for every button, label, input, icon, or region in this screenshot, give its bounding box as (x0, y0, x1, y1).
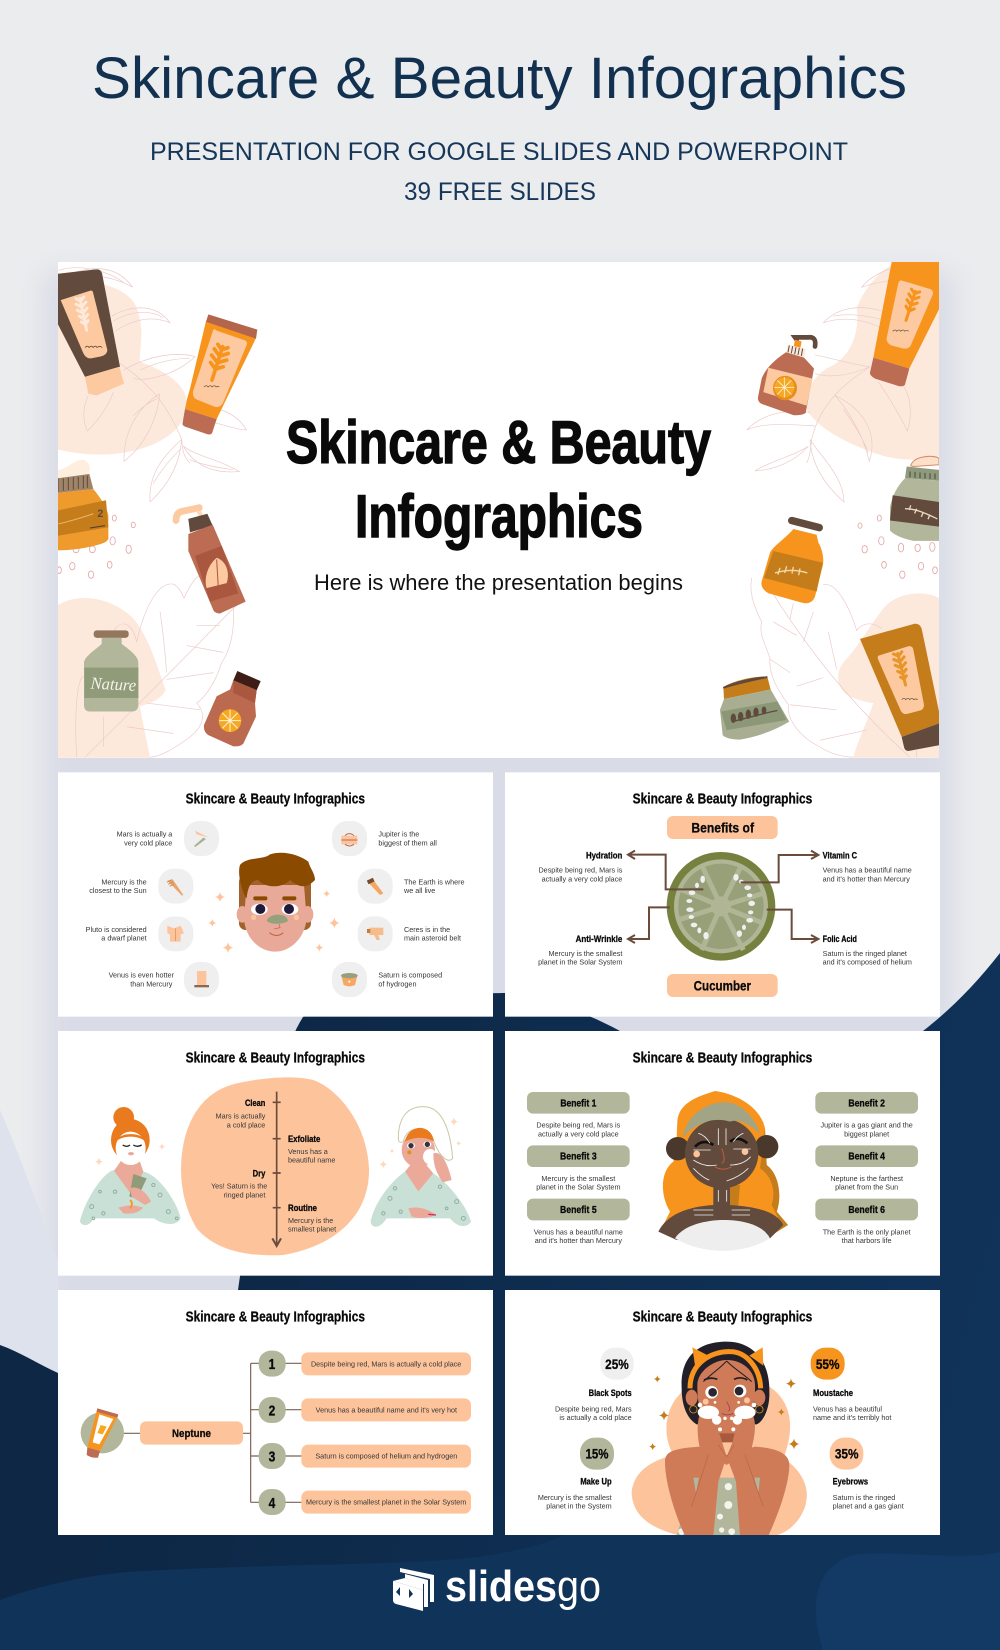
icon: small brown bottle (204, 671, 261, 746)
icon: soap bottle (758, 337, 815, 415)
benefit pills left: Venus has a beautiful name (534, 1227, 623, 1236)
slide texts left: Mercury is the (101, 877, 147, 886)
slide texts left: Mars is actually a (117, 830, 173, 839)
wordmark: slidesgo (445, 1562, 601, 1611)
step: dry: ringed planet (224, 1190, 265, 1199)
item 1: 1 (269, 1357, 275, 1373)
slide texts right: of hydrogen (378, 979, 416, 988)
beauty tool icons (167, 831, 383, 987)
panel: six benefits slide (505, 1031, 940, 1276)
icon: stacked slides (393, 1568, 434, 1611)
slide texts left: very cold place (124, 838, 172, 847)
item 3: 3 (269, 1450, 275, 1466)
benefit pills right: Benefit 6 (848, 1205, 885, 1216)
slide texts right: Saturn is composed (378, 971, 442, 980)
item 1: Despite being red, Mars is actually a cold place (311, 1359, 461, 1368)
benefit: hydration: actually a very cold place (542, 874, 622, 883)
stat: 25% black spots: Black Spots (589, 1388, 632, 1398)
logo: slidesgo (393, 1562, 601, 1611)
panel: routine timeline slide (58, 1031, 493, 1276)
slide texts right: Jupiter is the (378, 830, 419, 839)
connector arrows (628, 851, 818, 943)
benefit pills right: biggest planet (844, 1129, 889, 1138)
benefit: vitamin c: Venus has a beautiful name (823, 866, 912, 875)
benefit pills right: planet from the Sun (835, 1183, 898, 1192)
pill: cucumber: Cucumber (694, 978, 751, 994)
slide texts right: Ceres is in the (404, 925, 450, 934)
icon: right sage jar (890, 456, 939, 541)
subtitle: PRESENTATION FOR GOOGLE SLIDES AND POWERPOINT (150, 138, 848, 166)
step: routine: Routine (288, 1203, 317, 1213)
item 2: Venus has a beautiful name and it's very hot (316, 1405, 457, 1414)
stat: 55% moustache: 55% (816, 1356, 840, 1372)
benefit pills left: Benefit 3 (560, 1152, 597, 1163)
icon: tube on sage circle (81, 1408, 124, 1458)
step: routine: smallest planet (288, 1225, 336, 1234)
icon: orange bottle (761, 521, 823, 603)
benefit pills left: planet in the Solar System (536, 1183, 620, 1192)
slide title: Skincare & Beauty Infographics (633, 1049, 812, 1066)
benefit: anti-wrinkle: Mercury is the smallest (549, 949, 622, 958)
icon: brown tube (58, 269, 124, 395)
slide title: Skincare & Beauty Infographics (186, 1308, 365, 1325)
subtitle: 39 FREE SLIDES (404, 178, 596, 206)
icon: terracotta bottle with pump (176, 508, 246, 613)
icon: orange tube (182, 314, 257, 435)
step: clean: Clean (245, 1098, 265, 1108)
benefit pills left: Mercury is the smallest (541, 1174, 615, 1183)
benefit: anti-wrinkle (538, 934, 622, 967)
icon: sage jar Nature: Nature (89, 673, 137, 695)
benefit: vitamin c: Vitamin C (823, 851, 857, 861)
stat: 25% black spots: 25% (605, 1356, 629, 1372)
benefit pills left: and it's hotter than Mercury (535, 1236, 622, 1245)
step: clean: a cold place (227, 1120, 265, 1129)
stat: 15% make up: Make Up (580, 1477, 612, 1487)
benefit: anti-wrinkle: planet in the Solar System (538, 958, 622, 967)
item 1 (259, 1351, 471, 1377)
benefit: folic acid: Folic Acid (823, 934, 857, 944)
illustration: woman with massage lines (658, 1091, 788, 1251)
cover left decorations (57, 268, 261, 758)
step: clean: Mars is actually (216, 1112, 266, 1121)
icon: orange jar (58, 460, 108, 550)
slide title: Skincare & Beauty Infographics (186, 1049, 365, 1066)
cover heading (286, 409, 712, 550)
slide texts left: Venus is even hotter (109, 971, 175, 980)
item 4: 4 (269, 1496, 276, 1512)
item 3: Saturn is composed of helium and hydrogen (315, 1452, 457, 1461)
icon: orange jar: 2 (97, 508, 103, 520)
item 4 (259, 1489, 471, 1515)
benefit pills left: Benefit 5 (560, 1205, 597, 1216)
slide title: Skincare & Beauty Infographics (633, 1308, 812, 1325)
stat: 25% black spots (555, 1348, 634, 1422)
stat: 35% eyebrows: Eyebrows (833, 1477, 868, 1487)
step: dry: Yes! Saturn is the (211, 1182, 267, 1191)
benefit: folic acid: Saturn is the ringed planet (823, 949, 907, 958)
panel: neptune tree slide (58, 1290, 493, 1535)
benefit: vitamin c (823, 851, 912, 883)
slide texts left: Pluto is considered (86, 925, 147, 934)
benefit pills right: Jupiter is a gas giant and the (821, 1121, 913, 1130)
step: dry: Dry (253, 1169, 265, 1179)
page title: Skincare & Beauty Infographics (92, 46, 907, 111)
step: clean (216, 1098, 266, 1129)
benefit pills right: Benefit 4 (848, 1152, 885, 1163)
node: neptune: Neptune (172, 1428, 211, 1440)
cover right decorations (720, 262, 939, 758)
benefit: hydration (538, 851, 623, 883)
benefit pills right (815, 1092, 918, 1245)
stat: 15% make up: planet in the System (546, 1502, 612, 1511)
stat: 55% moustache: Moustache (813, 1388, 853, 1398)
benefit: hydration: Hydration (586, 851, 623, 861)
stat: 15% make up: 15% (585, 1446, 609, 1462)
icon: sage jar Nature (84, 630, 138, 712)
cover heading: Skincare & Beauty (286, 409, 712, 476)
step: exfoliate: Venus has a (288, 1147, 329, 1156)
panel: cucumber benefits slide (505, 772, 940, 1017)
slide texts right: biggest of them all (378, 838, 437, 847)
benefit: hydration: Despite being red, Mars is (538, 866, 623, 875)
stat: 35% eyebrows (830, 1438, 904, 1511)
step: routine: Mercury is the (288, 1216, 333, 1225)
slide title: Skincare & Beauty Infographics (633, 790, 812, 807)
slide texts left: than Mercury (130, 979, 173, 988)
subtitle (150, 138, 848, 206)
peach blob (181, 1077, 369, 1255)
stat: 55% moustache: Venus has a beautiful (813, 1404, 882, 1413)
benefit pills left: actually a very cold place (538, 1129, 619, 1138)
node: neptune (140, 1421, 243, 1445)
benefit: vitamin c: and it's hotter than Mercury (823, 874, 910, 883)
slide texts left: closest to the Sun (89, 886, 147, 895)
benefit pills left: Despite being red, Mars is (536, 1121, 621, 1130)
item 2: 2 (269, 1403, 275, 1419)
item 2 (259, 1397, 471, 1423)
stat: 55% moustache (811, 1348, 891, 1422)
pill: benefits of: Benefits of (691, 820, 754, 836)
stat: 25% black spots: Despite being red, Mars (555, 1404, 632, 1413)
panel: main cover slide (57, 262, 939, 758)
benefit pills right: The Earth is the only planet (823, 1227, 911, 1236)
slide texts right: main asteroid belt (404, 934, 461, 943)
step: exfoliate: Exfoliate (288, 1134, 320, 1144)
illustration: man's face (237, 853, 315, 952)
slide title: Skincare & Beauty Infographics (186, 790, 365, 807)
step: routine (288, 1203, 336, 1234)
stat: 15% make up: Mercury is the smallest (538, 1493, 612, 1502)
benefit: folic acid (823, 934, 912, 967)
illustration: woman washing face (632, 1342, 807, 1536)
step: exfoliate (288, 1134, 335, 1165)
illustration: woman with towel (371, 1107, 471, 1227)
illustration: woman with face mask (80, 1107, 181, 1225)
slide texts right: The Earth is where (404, 877, 465, 886)
slide texts right: we all live (403, 886, 435, 895)
sparkles (95, 1117, 461, 1168)
stat: 35% eyebrows: planet and a gas giant (833, 1502, 904, 1511)
timeline arrow (272, 1092, 281, 1246)
icon circles (158, 821, 393, 997)
slide texts left (86, 830, 175, 988)
icon: right orange tube (870, 262, 939, 386)
stat: 15% make up (538, 1438, 614, 1511)
slide texts right (378, 830, 465, 988)
cover heading: Infographics (355, 483, 643, 550)
benefit pills left: Benefit 1 (560, 1098, 597, 1109)
icon: mustard tube (860, 624, 939, 751)
sparkles (208, 890, 340, 953)
icon: sage low jar (720, 677, 789, 740)
step: dry (211, 1169, 267, 1199)
item 3 (259, 1443, 471, 1469)
illustration: cucumber slice (667, 852, 775, 961)
panel: face icons slide (58, 772, 493, 1017)
stat: 55% moustache: name and it's terribly hot (813, 1413, 891, 1422)
item 4: Mercury is the smallest planet in the Solar System (306, 1498, 466, 1507)
step: exfoliate: beautiful name (288, 1156, 335, 1165)
slide texts left: a dwarf planet (101, 934, 147, 943)
benefit pills left (527, 1092, 630, 1245)
connector tree (124, 1363, 302, 1502)
cover subheading: Here is where the presentation begins (314, 570, 683, 595)
benefit pills right: Neptune is the farthest (830, 1174, 903, 1183)
stat: 35% eyebrows: Saturn is the ringed (833, 1493, 895, 1502)
pill: benefits of (667, 816, 778, 839)
stat: 35% eyebrows: 35% (835, 1446, 859, 1462)
benefit: folic acid: and it's composed of helium (823, 958, 912, 967)
pill: cucumber (667, 974, 778, 997)
benefit: anti-wrinkle: Anti-Wrinkle (576, 934, 622, 944)
benefit pills right: that harbors life (842, 1236, 892, 1245)
panel: percentages slide (505, 1290, 940, 1536)
sparkles (649, 1375, 799, 1450)
stat: 25% black spots: is actually a cold place (559, 1413, 632, 1422)
benefit pills right: Benefit 2 (848, 1098, 885, 1109)
